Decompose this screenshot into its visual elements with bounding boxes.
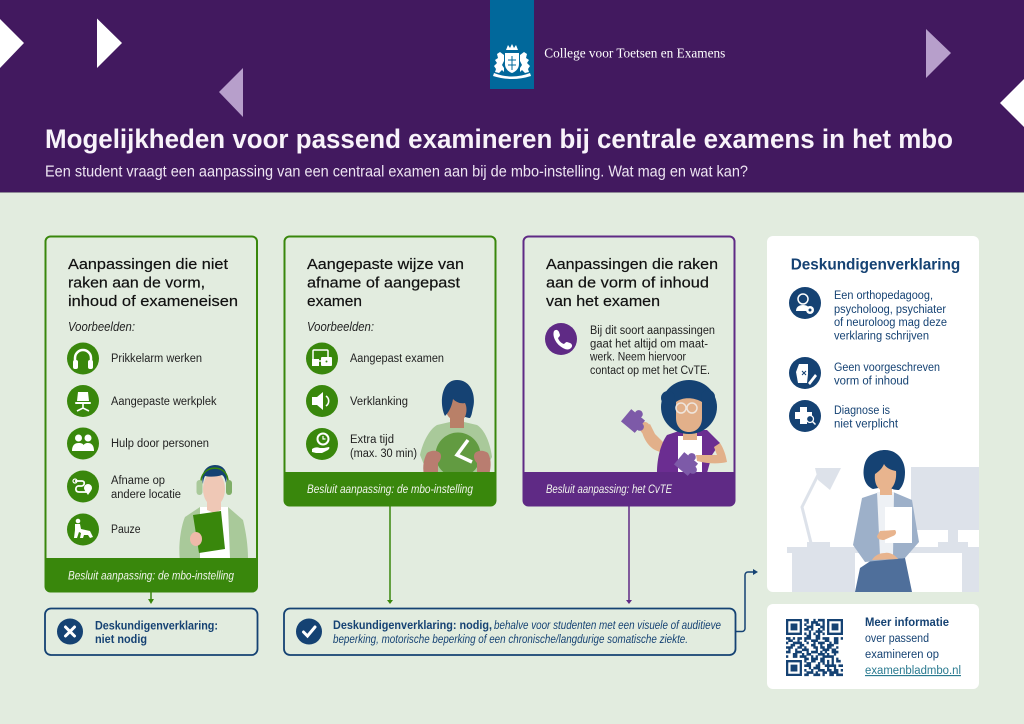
panel: aanpassingen die niet raken aan de vorm [45, 236, 258, 592]
header band [0, 0, 1024, 193]
body text: contact op met het CvTE. [590, 365, 710, 377]
logo: coat of arms on blue ribbon [490, 0, 534, 89]
item text: verklaring schrijven [834, 330, 929, 342]
more info text: examineren op [865, 649, 939, 661]
subtitle: Een student vraagt een aanpassing van een centraal examen aan bij de mbo-instelling. Wat mag en wat kan? [45, 164, 748, 180]
callout text: Deskundigenverklaring: [95, 620, 218, 632]
item text: psycholoog, psychiater [834, 304, 946, 316]
icon: speaker [306, 385, 338, 417]
body text: Bij dit soort aanpassingen [590, 325, 715, 337]
callout text [95, 620, 218, 646]
arrow: lilac left-pointing [219, 68, 243, 117]
illustration: person with puzzle piece [621, 380, 727, 473]
item text: Pauze [111, 524, 140, 536]
arrow: panel 1 to box [148, 592, 154, 604]
puzzle piece overlapping footer [674, 448, 704, 478]
heading: inhoud of exameneisen [68, 293, 238, 310]
heading [307, 256, 464, 310]
body text: gaat het altijd om maat- [590, 338, 708, 350]
icon: headphones [67, 342, 99, 374]
body text: werk. Neem hiervoor [589, 352, 686, 364]
arrow: panel 3 to box [626, 506, 632, 604]
besluit footer [523, 472, 735, 506]
icon: route to location [67, 470, 99, 502]
icon: adapted exam screens [306, 342, 338, 374]
more info text: Meer informatie [865, 617, 949, 629]
QR code [786, 619, 843, 676]
icon: desk chair [67, 385, 99, 417]
heading: raken aan de vorm, [68, 274, 205, 292]
illustration: student with headphones and clipboard [179, 465, 248, 561]
illustration: expert with paper [853, 450, 919, 592]
item text [834, 405, 899, 430]
heading [546, 256, 718, 310]
heading: Deskundigenverklaring [791, 256, 960, 274]
item text [111, 475, 181, 501]
besluit footer [45, 558, 258, 592]
callout text: beperking, motorische beperking of een chronische/langdurige somatische ziekte. [333, 634, 688, 646]
callout text [333, 620, 721, 646]
illustration: desk with lamp and monitor [787, 467, 979, 592]
item text: Afname op [111, 475, 165, 487]
icon: check [296, 618, 322, 644]
arrow: white second [97, 18, 122, 68]
arrow: lilac right-pointing [926, 29, 951, 78]
item text: andere locatie [111, 489, 181, 501]
callout text: behalve voor studenten met een visuele of auditieve [494, 620, 721, 632]
item text: Aangepast examen [350, 353, 444, 365]
item text: of neuroloog mag deze [834, 317, 947, 329]
title: Mogelijkheden voor passend examineren bij centrale examens in het mbo [45, 124, 953, 154]
callout text: niet nodig [95, 634, 147, 646]
item text: Verklanking [350, 396, 408, 408]
callout: nodig [284, 608, 736, 655]
heading: van het examen [546, 293, 660, 310]
icon: medical cross with magnifier [789, 400, 821, 432]
heading [68, 256, 238, 310]
item text: niet verplicht [834, 418, 899, 430]
arrow: to deskundigenverklaring panel [736, 569, 758, 632]
item text: (max. 30 min) [350, 448, 417, 460]
heading: Aanpassingen die niet [68, 256, 229, 273]
icon: document crossed [789, 357, 821, 389]
heading: aan de vorm of inhoud [546, 274, 709, 292]
panel: aangepaste wijze van afname [284, 236, 496, 506]
voorbeelden label: Voorbeelden: [307, 319, 374, 334]
item text: Prikkelarm werken [111, 353, 202, 365]
item text [834, 362, 940, 388]
heading: Aangepaste wijze van [307, 256, 464, 273]
icon: cross [57, 618, 83, 644]
item text: Geen voorgeschreven [834, 362, 940, 374]
panel: aanpassingen die raken aan de vorm [523, 236, 735, 506]
item text: Een orthopedagoog, [834, 290, 933, 302]
more info text [865, 617, 961, 677]
panel: meer informatie [767, 604, 979, 689]
item text: Diagnose is [834, 405, 890, 417]
callout text: Deskundigenverklaring: nodig, [333, 620, 492, 632]
item text: Aangepaste werkplek [111, 396, 217, 408]
arrow: white right edge [1000, 79, 1024, 127]
more info text: over passend [865, 633, 929, 645]
besluit footer [284, 472, 496, 506]
arrow: panel 2 to box [387, 506, 393, 604]
icon: phone [545, 323, 577, 355]
more info text: examenbladmbo.nl [865, 665, 961, 677]
besluit footer: Besluit aanpassing: de mbo-instelling [68, 570, 235, 582]
heading: afname of aangepast [307, 274, 461, 292]
organisation name: College voor Toetsen en Examens [544, 46, 725, 60]
icon: two persons [67, 428, 99, 460]
panel: deskundigenverklaring [767, 236, 979, 592]
item text: vorm of inhoud [834, 376, 909, 388]
illustration: student with clock [420, 380, 492, 478]
callout: niet nodig [45, 608, 258, 655]
item text [834, 290, 947, 342]
icon: extra time [306, 428, 338, 460]
arrow: white left [0, 19, 24, 68]
heading: Aanpassingen die raken [546, 256, 718, 273]
icon: professional [789, 287, 821, 319]
icon: person with dog [67, 514, 99, 546]
besluit footer: Besluit aanpassing: het CvTE [546, 484, 672, 496]
item text: Extra tijd [350, 434, 394, 446]
besluit footer: Besluit aanpassing: de mbo-instelling [307, 484, 474, 496]
body text [589, 325, 715, 377]
heading: examen [307, 293, 362, 310]
item text: Hulp door personen [111, 438, 209, 450]
item text [350, 434, 417, 460]
voorbeelden label: Voorbeelden: [68, 319, 135, 334]
